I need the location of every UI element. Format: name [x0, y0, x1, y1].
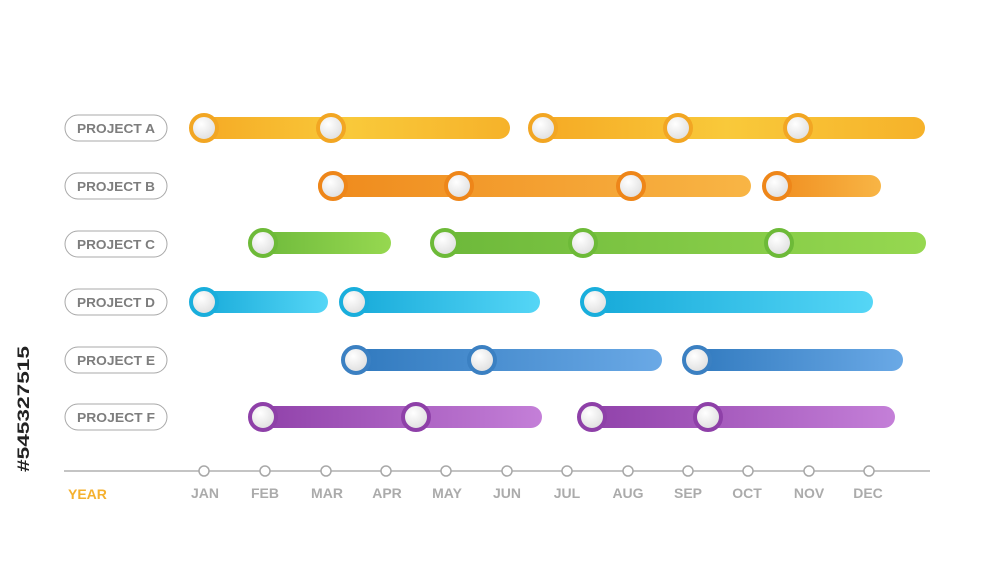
timeline axis: MAR [311, 485, 343, 501]
text: PROJECT D [77, 295, 155, 310]
text: PROJECT B [77, 179, 155, 194]
milestone knobs [191, 115, 811, 430]
timeline axis: JAN [191, 485, 219, 501]
text: PROJECT C [77, 237, 156, 252]
timeline axis: JUN [493, 485, 521, 501]
year label: YEAR [68, 486, 107, 502]
gantt bars [190, 117, 926, 428]
project labels [65, 115, 167, 430]
timeline axis: APR [372, 485, 402, 501]
timeline axis: FEB [251, 485, 279, 501]
timeline axis: AUG [612, 485, 644, 501]
timeline axis: OCT [732, 485, 762, 501]
timeline axis: NOV [794, 485, 825, 501]
timeline axis: DEC [853, 485, 883, 501]
timeline axis [64, 466, 930, 501]
text: PROJECT E [77, 353, 155, 368]
timeline axis: SEP [674, 485, 702, 501]
side id text: #545327515 [14, 346, 33, 472]
text: PROJECT F [77, 410, 155, 425]
text: PROJECT A [77, 121, 156, 136]
timeline axis: JUL [554, 485, 581, 501]
timeline axis: MAY [432, 485, 463, 501]
